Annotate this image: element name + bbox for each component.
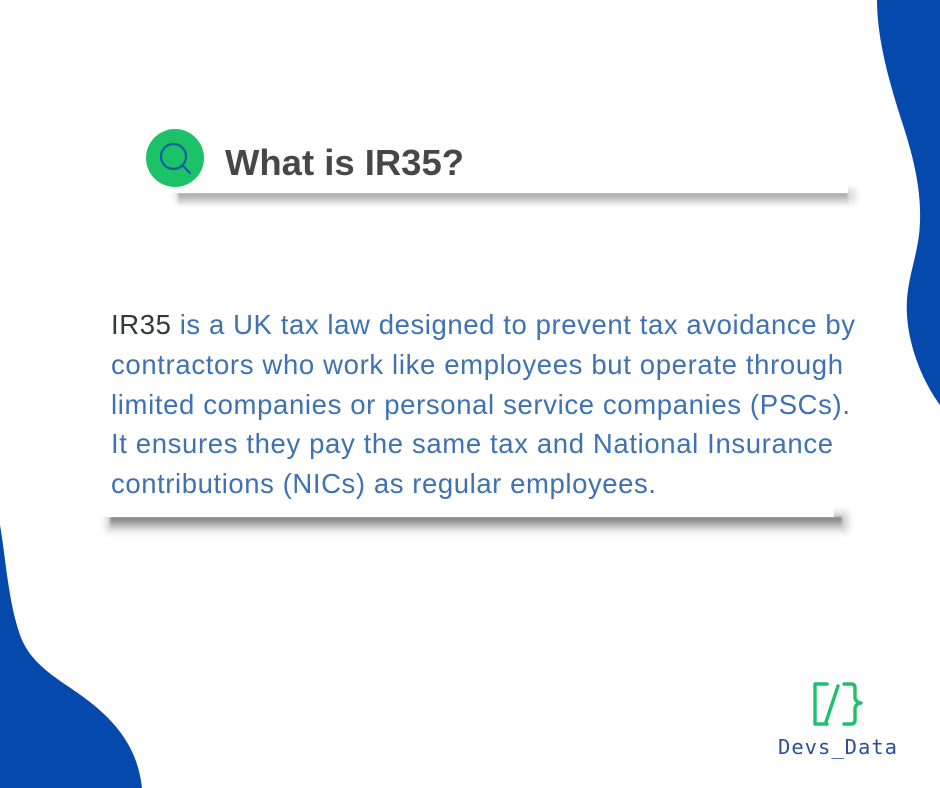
title bar shadow bbox=[150, 120, 856, 207]
wordmark: Devs_Data bbox=[778, 735, 897, 759]
body text: IR35 is a UK tax law designed to prevent tax avoidance by bbox=[111, 309, 855, 340]
icon: bracket slash brace bbox=[815, 684, 861, 724]
body panel shadow bbox=[90, 300, 848, 534]
body text: contributions (NICs) as regular employees. bbox=[111, 468, 656, 499]
icon: search badge bbox=[146, 129, 204, 187]
body text: limited companies or personal service companies (PSCs). bbox=[111, 389, 850, 420]
title: What is IR35? bbox=[225, 142, 464, 183]
body text: It ensures they pay the same tax and National Insurance bbox=[111, 428, 833, 459]
logo: Devs_Data bbox=[778, 684, 897, 759]
blob: bottom left bbox=[0, 525, 142, 788]
blob: top right bbox=[877, 0, 940, 405]
body text bbox=[111, 309, 855, 499]
body text: contractors who work like employees but operate through bbox=[111, 349, 843, 380]
